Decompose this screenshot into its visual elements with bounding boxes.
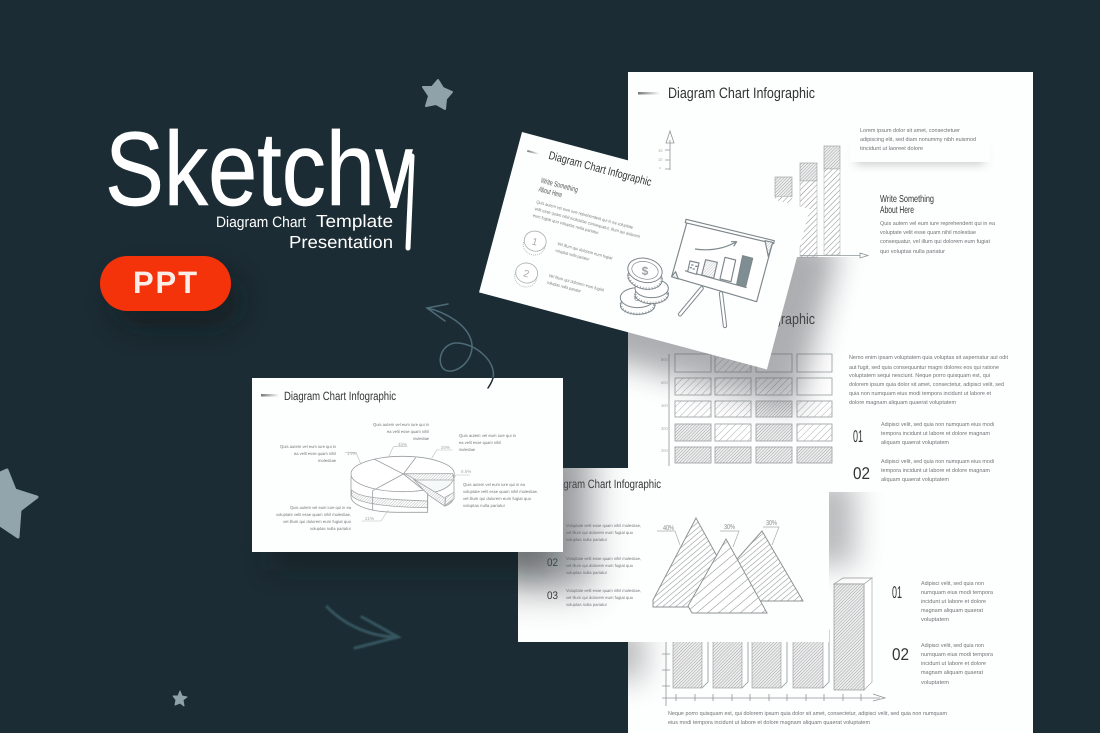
pie label right: ea velit esse quam nihil — [459, 440, 501, 445]
pyramid text 01 — [566, 523, 641, 542]
callout card: tincidunt ut laoreet dolore — [860, 145, 923, 152]
pie label left: ea velit esse quam nihil — [294, 451, 336, 456]
slide paragraph: eum fugiat quo voluptas nulla pariatur — [532, 213, 600, 235]
text block: write something: Quis autem vel eum iure reprehenderit qui in ea — [880, 220, 996, 227]
panel: tall page — [628, 72, 1033, 733]
percent labels: 8.5% — [461, 469, 471, 474]
pyramid text 02: Voluptate velit esse quam nihil molestiae, — [566, 556, 641, 561]
percent labels: 14% — [347, 451, 356, 456]
coin item 1 — [521, 229, 615, 275]
percent labels: 21% — [365, 516, 374, 521]
text block: paragraph: dolorem ipsum quia dolor sit amet, consectetur, adipisci velit, sed — [849, 381, 1004, 388]
pyramid text 02: voluptas nulla pariatur — [566, 570, 608, 575]
pie label left — [280, 444, 337, 463]
grid chart: 400 — [661, 403, 668, 408]
pie label lower left: vel illum qui dolorem eum fugiat quo — [283, 519, 352, 524]
item 01 lower: numquam eius modi tempora — [921, 589, 994, 596]
footer note: eius modi tempora incidunt ut labore et dolore magnam aliquam quaerat voluptatem — [668, 719, 870, 726]
callout card: Lorem ipsum dolor sit amet, consectetuer — [860, 127, 960, 134]
pie label top: ea velit esse quam nihil — [387, 429, 429, 434]
text block: paragraph: aut fugit, sed quia consequuntur magni dolores eos qui ratione — [849, 364, 999, 371]
coin item 1: voluptas nulla pariatur — [555, 248, 590, 262]
title block — [108, 128, 414, 250]
pyramid chart: 40% — [663, 525, 674, 532]
pyramid text 02: vel illum qui dolorem eum fugiat quo — [566, 563, 634, 568]
illustration: coin stack: $ — [642, 264, 648, 278]
pyramid text 03: vel illum qui dolorem eum fugiat quo — [566, 595, 634, 600]
item 01 — [853, 421, 994, 446]
text block: write something: consequatur, vel illum qui dolorem eum fugiat — [880, 238, 990, 245]
pie label right: Quis autem vel eum iure qui in — [459, 433, 517, 438]
shadows on tall page — [628, 257, 870, 694]
pyramid chart: 30% — [766, 520, 777, 527]
coin item 1: 1 — [530, 236, 539, 249]
page heading 1: Diagram Chart Infographic — [668, 85, 815, 102]
grid chart: 600 — [661, 380, 668, 385]
pyramid text 03 — [547, 588, 641, 607]
pie label top — [373, 422, 430, 441]
star: large left — [0, 470, 37, 537]
slide subheading: Write Something — [540, 176, 579, 194]
illustration: coin stack — [620, 255, 668, 314]
item 02: 02 — [853, 464, 870, 483]
pyramid text 03: Voluptate velit esse quam nihil molestiae, — [566, 588, 641, 593]
subtitle: Diagram Chart Template — [216, 211, 393, 231]
pie label lower right: vel illum qui dolorem eum fugiat quo — [463, 496, 532, 501]
item 02 lower: magnam aliquam quaerat — [921, 669, 983, 676]
item 02 lower: 02 — [892, 645, 909, 664]
pyramid text 01: voluptas nulla pariatur — [566, 537, 608, 542]
text block: paragraph — [849, 354, 1008, 406]
slide heading: Diagram Chart Infographic — [284, 389, 396, 403]
item 02 lower: incidunt ut labore et dolore — [921, 660, 986, 667]
panel: slide pyramids — [518, 468, 829, 642]
item 02 lower: Adipisci velit, sed quia non — [921, 642, 984, 649]
text block: paragraph: dolore magnam aliquam quaerat voluptatem — [849, 399, 956, 406]
pyramid text 03: voluptas nulla pariatur — [566, 602, 608, 607]
item 01 lower: Adipisci velit, sed quia non — [921, 580, 984, 587]
stacked bar chart: 10 — [658, 157, 663, 162]
pie label left: molestiae — [318, 458, 337, 463]
pie label lower left: voluptate velit esse quam nihil molestiae, — [276, 512, 351, 517]
grid chart: 800 — [661, 357, 668, 362]
page heading 2 (mostly covered): Diagram Chart Infographic — [668, 311, 815, 328]
grid chart: 200 — [661, 448, 668, 453]
coin item 2: voluptas nulla pariatur — [546, 280, 582, 294]
footer note: Neque porro quisquam est, qui dolorem ipsum quia dolor sit amet, consectetur, adipisci velit, sed quia non numquam — [668, 710, 947, 717]
pie label lower right — [463, 482, 538, 508]
badge: PPT — [100, 256, 231, 311]
pyramid text 01: vel illum qui dolorem eum fugiat quo — [566, 530, 634, 535]
pyramid text 01: Voluptate velit esse quam nihil molestiae, — [566, 523, 641, 528]
coin item 2 — [512, 261, 606, 307]
star: small bottom — [173, 691, 187, 706]
item 02: tempora incidunt ut labore et dolore magnam — [881, 467, 990, 474]
pyramid text 02 — [547, 556, 641, 575]
stacked bar chart: 5 — [659, 166, 662, 171]
title: Sketchy: y — [375, 111, 413, 228]
item 02: aliquam quaerat voluptatem — [881, 476, 949, 483]
slide paragraph: Quis autem vel eum iure reprehenderit qui in ea voluptate — [536, 199, 634, 230]
arrow: lower right-pointing — [327, 607, 398, 648]
coin item 1: Vel illum qui dolorem eum fugiat — [557, 241, 614, 261]
text block: write something: quo voluptas nulla pariatur — [880, 248, 945, 255]
arrow: curly — [427, 304, 493, 388]
brush mark — [261, 394, 279, 396]
pyramid chart — [653, 518, 803, 613]
subtitle: Diagram Chart Template: Diagram Chart — [216, 214, 307, 231]
text block: write something: About Here — [880, 205, 914, 216]
pie label right — [459, 433, 517, 452]
slide paragraph: velit esse quam nihil molestiae consequatur, illum qui dolorem — [534, 206, 641, 239]
slide subheading: About Here — [538, 184, 563, 199]
illustration: coin stack: € — [634, 292, 639, 303]
pie label lower left — [276, 505, 352, 531]
item 02: Adipisci velit, sed quia non numquam eius modi — [881, 458, 994, 465]
item 02 lower: numquam eius modi tempora — [921, 651, 994, 658]
pie chart — [345, 447, 470, 521]
pie label lower right: voluptate velit esse quam nihil molestiae, — [463, 489, 538, 494]
stacked bar chart — [658, 131, 868, 258]
title: Sketchy: Sketch — [105, 111, 375, 228]
item 01 lower: voluptatem — [921, 616, 949, 623]
panel: slide pie chart — [252, 378, 563, 552]
pyramid chart: 30% — [724, 524, 735, 531]
pie label right: molestiae — [459, 447, 476, 452]
subtitle: Presentation: Presentation — [289, 232, 393, 252]
text block: paragraph: Nemo enim ipsam voluptatem quia voluptas sit aspernatur aut odit — [849, 354, 1008, 361]
coin item 2: Vel illum qui dolorem eum fugiat — [548, 273, 605, 293]
pie label top: Quis autem vel eum iure qui in — [373, 422, 430, 427]
percent labels: 20% — [441, 445, 450, 450]
slide heading: Diagram Chart Infographic — [547, 150, 653, 189]
text block: write something: Write Something — [880, 194, 934, 205]
pie label lower right: voluptas nulla pariatur — [463, 503, 506, 508]
item 01 lower: incidunt ut labore et dolore — [921, 598, 986, 605]
item 01: aliquam quaerat voluptatem — [881, 439, 949, 446]
pyramid text 03: 03 — [547, 590, 558, 602]
item 01: 01 — [853, 427, 863, 446]
item 02 lower: voluptatem — [921, 679, 949, 686]
item 01: tempora incidunt ut labore et dolore magnam — [881, 430, 990, 437]
pie label lower left: Quis autem vel eum iure qui in ea — [290, 505, 352, 510]
pyramid text 02: 02 — [547, 557, 558, 569]
brush mark — [527, 150, 539, 155]
slide subheading — [538, 176, 579, 203]
pie label lower left: voluptas nulla pariatur — [310, 526, 352, 531]
item 02 — [853, 458, 994, 483]
stacked bar chart: 15 — [658, 148, 663, 153]
percent labels: 45% — [398, 442, 407, 447]
footer note — [668, 710, 947, 726]
item 01 lower: 01 — [892, 583, 902, 602]
text block: write something: voluptate velit esse quam nihil molestiae — [880, 229, 976, 236]
callout card — [850, 115, 990, 164]
grid chart: 300 — [661, 426, 668, 431]
panel: tilted slide — [479, 132, 810, 369]
item 02 lower — [892, 642, 994, 686]
item 01 lower — [892, 580, 994, 623]
bar chart: bottom — [662, 578, 885, 706]
illustration: presentation board — [672, 219, 774, 326]
item 01 lower: magnam aliquam quaerat — [921, 607, 983, 614]
percent labels — [347, 442, 471, 521]
subtitle: Diagram Chart Template: Template — [316, 211, 393, 231]
item 01: Adipisci velit, sed quia non numquam eius modi — [881, 421, 994, 428]
text block: paragraph: voluptatem sequi nesciunt. Neque porro quisquam est, qui — [849, 372, 990, 379]
badge: PPT: PPT — [133, 265, 197, 300]
grid chart — [661, 354, 832, 466]
pie label left: Quis autem vel eum iure qui in — [280, 444, 337, 449]
coin item 2: 2 — [522, 268, 531, 281]
title: Sketchy — [108, 128, 414, 250]
text block: write something — [880, 194, 996, 255]
badge shadow — [115, 275, 240, 327]
slide heading: Diagram Chart Infographic — [549, 477, 661, 491]
star: top — [423, 80, 452, 109]
pie label top: molestiae — [413, 436, 430, 441]
callout card: adipiscing elit, sed diam nonummy nibh euismod — [860, 136, 976, 143]
text block: paragraph: quia non numquam eius modi tempora incidunt ut labore et — [849, 390, 991, 397]
shadow of pie slide — [495, 440, 590, 590]
pie label lower right: Quis autem vel eum iure qui in ea — [463, 482, 526, 487]
